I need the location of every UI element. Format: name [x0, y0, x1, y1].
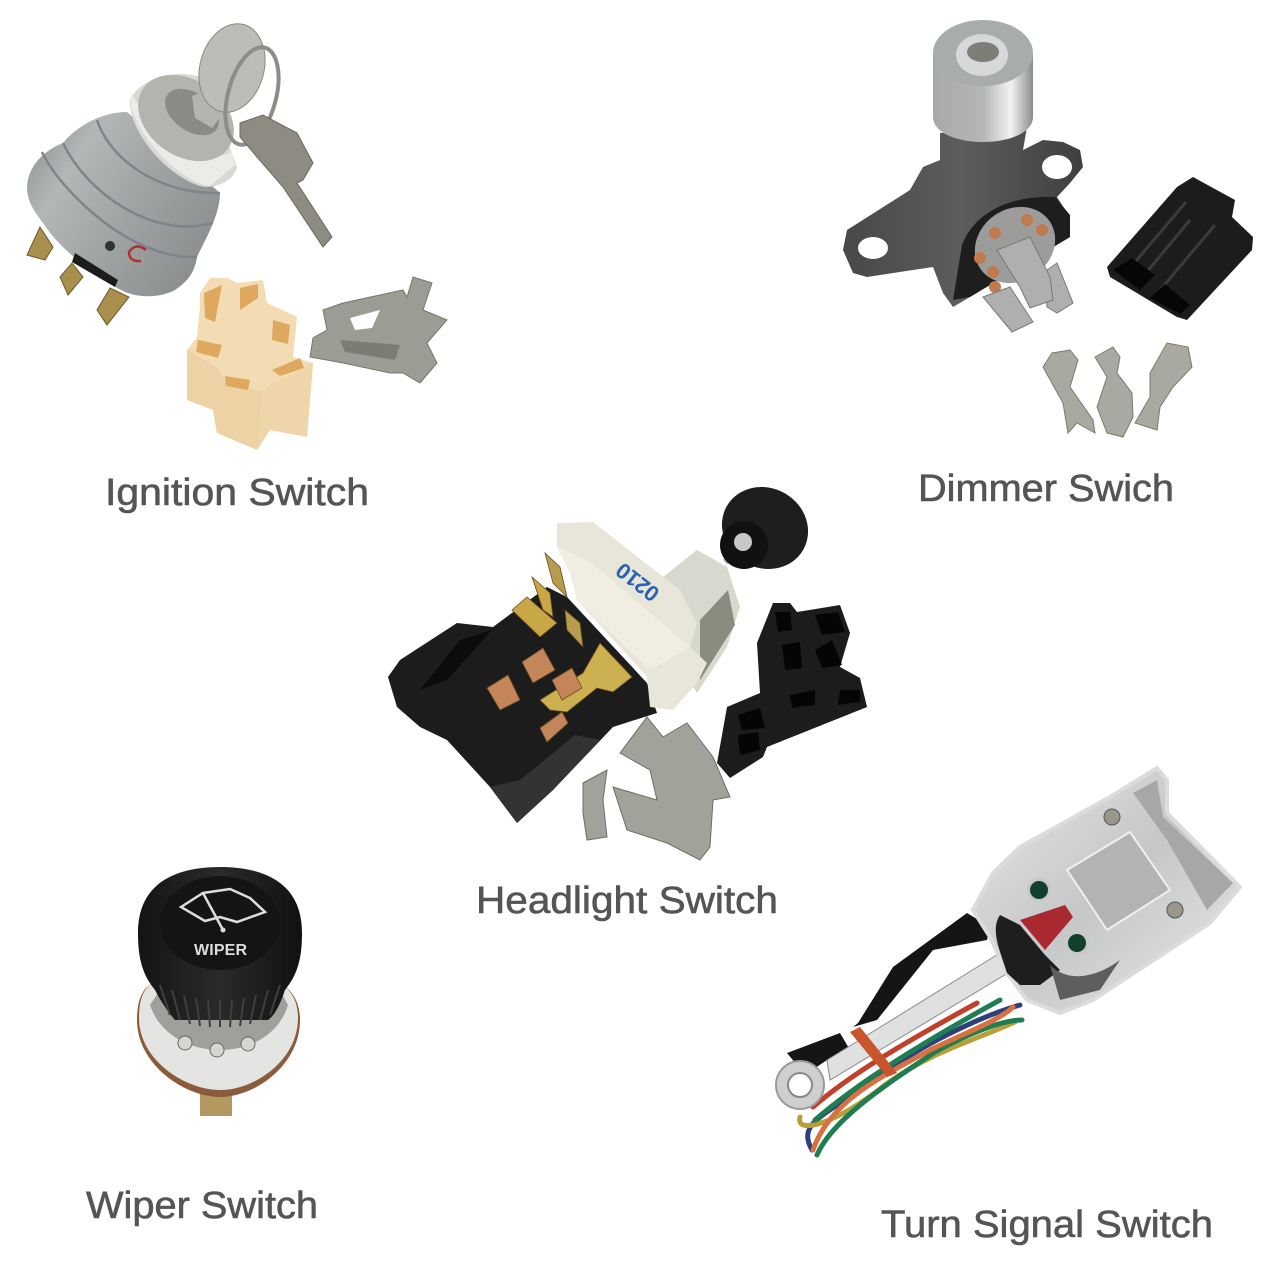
- panel: headlight switch: [388, 471, 867, 860]
- icon: ignition keys: [189, 16, 332, 247]
- icon: black inner arm: [787, 913, 990, 1075]
- panel: turn signal switch: [776, 768, 1240, 1155]
- icon: dimmer switch metal cap: [933, 20, 1033, 142]
- icon: chrome housing: [137, 978, 300, 1097]
- icon: brass and copper terminals: [487, 553, 632, 742]
- panel: dimmer switch: [843, 20, 1253, 437]
- icon: black wiper knob: [138, 867, 302, 1027]
- icon: black knob: [707, 471, 823, 585]
- heading: Wiper Switch: Wiper Switch: [86, 1185, 318, 1227]
- panel: ignition switch: [27, 16, 447, 450]
- icon: black dimmer connector: [1107, 177, 1253, 320]
- icon: chrome lever: [776, 953, 1013, 1109]
- icon: chrome switch housing: [973, 768, 1240, 1013]
- icon: ignition switch spade terminals: [27, 227, 129, 325]
- icon: white ceramic block: [557, 522, 707, 710]
- icon: metal crimp terminals: [310, 277, 447, 383]
- icon: ignition switch body: [27, 57, 250, 296]
- icon: colored wires: [800, 1000, 1022, 1155]
- icon: black Z-shaped connector: [717, 603, 867, 778]
- icon: white ceramic block: 0210: [611, 558, 664, 607]
- icon: beige connector: [187, 278, 313, 450]
- heading: Headlight Switch: Headlight Switch: [476, 880, 778, 922]
- heading: Dimmer Swich: Dimmer Swich: [918, 468, 1174, 510]
- icon: black switch base: [388, 587, 657, 823]
- icon: black wiper knob: WIPER: [194, 942, 247, 959]
- heading: Ignition Switch: Ignition Switch: [105, 472, 369, 514]
- icon: dimmer switch cast body: [843, 127, 1083, 332]
- panel: wiper switch: [137, 867, 302, 1116]
- icon: metal barrel and shaft: [663, 545, 745, 693]
- icon: brass terminal: [200, 1092, 232, 1116]
- icon: dimmer crimp terminals: [1043, 343, 1192, 437]
- heading: Turn Signal Switch: Turn Signal Switch: [881, 1204, 1213, 1246]
- icon: cluster of crimp terminals: [583, 717, 730, 860]
